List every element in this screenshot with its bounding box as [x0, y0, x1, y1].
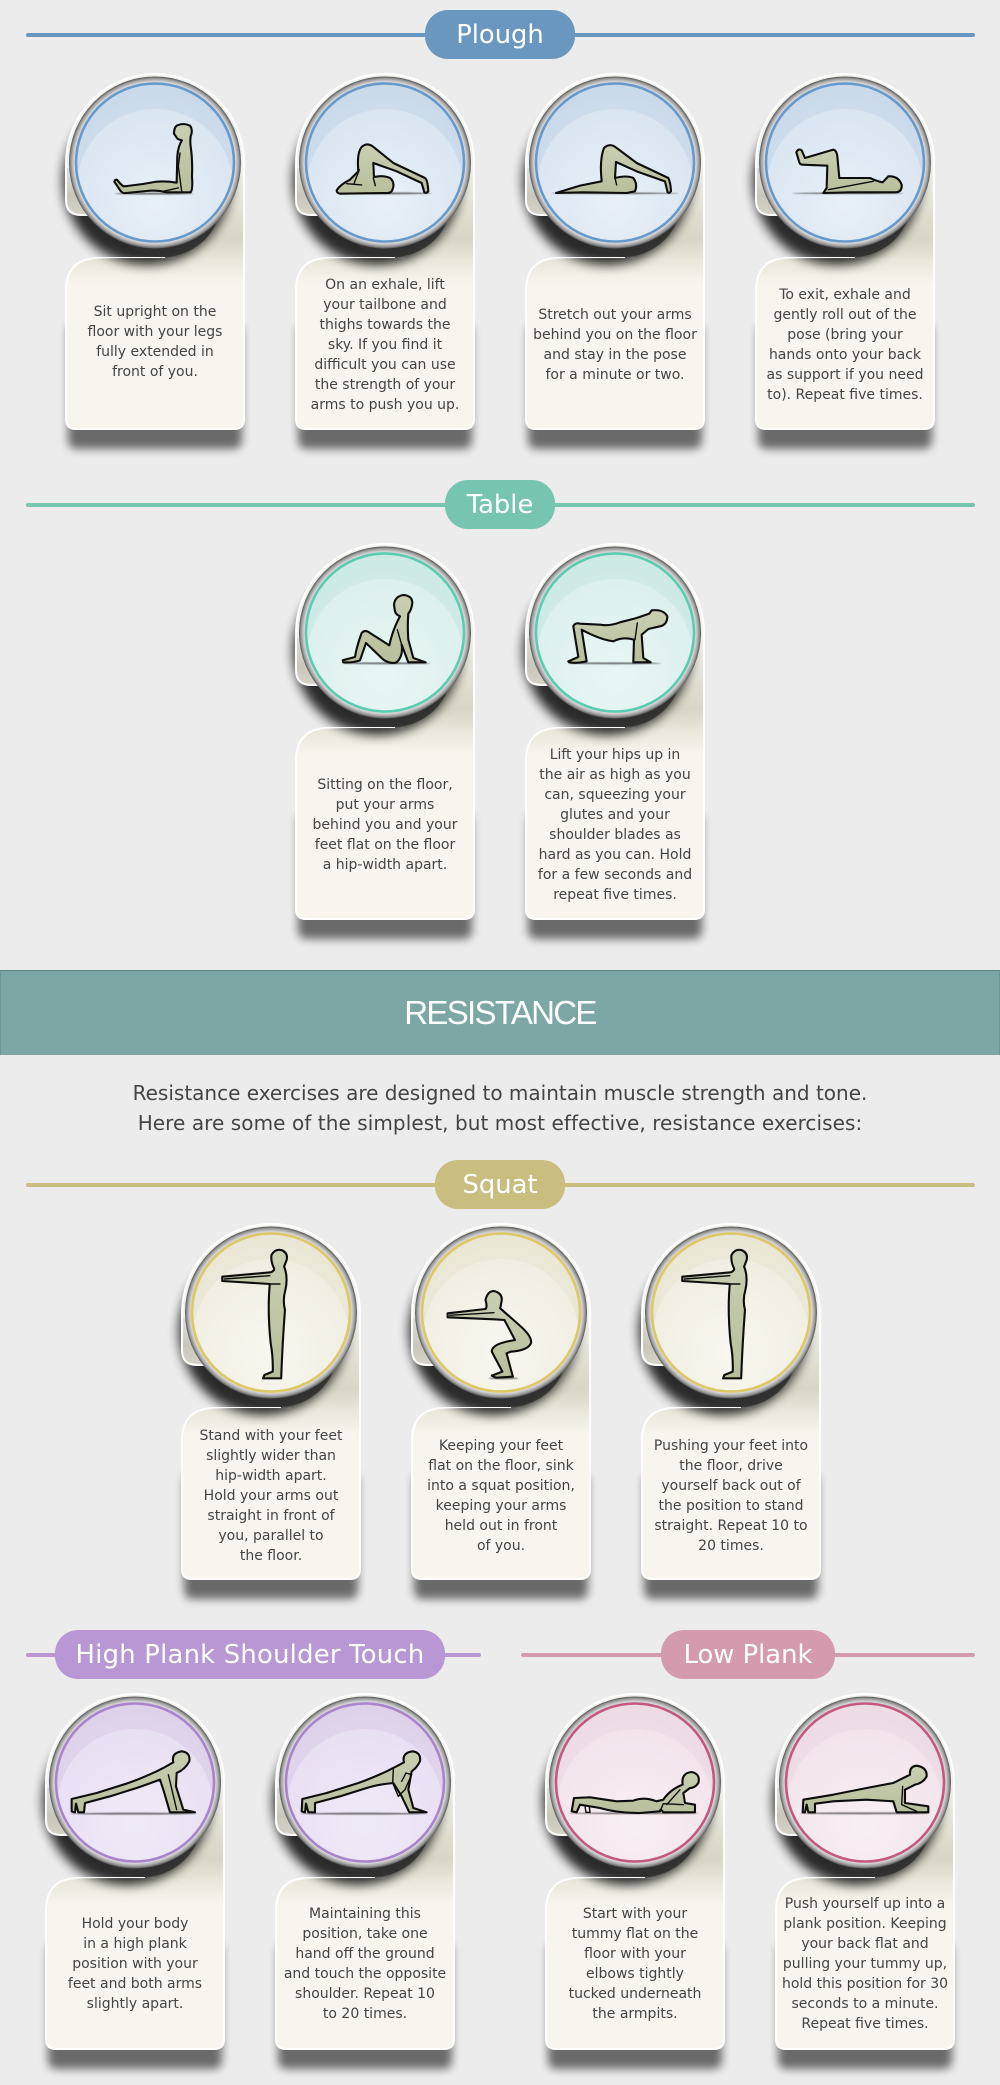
card: high plank step 2 [264, 1693, 458, 2076]
figure: plough with arms stretched out [552, 145, 678, 194]
card: squat step 2: flat on the floor, sink [428, 1458, 574, 1474]
figure: hips lifted, legs over [337, 144, 432, 194]
banner: resistance [0, 970, 1000, 1055]
heading: Plough: Plough [456, 20, 544, 50]
card: high plank step 1: in a high plank [83, 1936, 187, 1952]
card: low plank step 2: pulling your tummy up, [783, 1956, 947, 1972]
card: squat step 3: the position to stand [659, 1498, 803, 1514]
card: table step 1: Sitting on the floor, [317, 777, 453, 793]
card: plough step 4: as support if you need [767, 367, 923, 383]
card: squat step 3: yourself back out of [661, 1478, 801, 1494]
card: high plank step 2: position, take one [302, 1926, 428, 1942]
card: table step 2: glutes and your [560, 807, 670, 823]
figure: rolling out with legs raised [792, 150, 903, 194]
card: table step 1: a hip-width apart. [323, 857, 447, 873]
card: squat step 3: Pushing your feet into [654, 1438, 808, 1454]
figure: lying on tummy, elbows tucked [568, 1772, 699, 1814]
card: high plank step 1: Hold your body [82, 1916, 188, 1932]
figure: standing with arms forward [222, 1250, 287, 1378]
card: table step 2: Lift your hips up in [550, 747, 680, 763]
card: low plank step 2: hold this position for 30 [782, 1976, 948, 1992]
card: low plank step 2: Push yourself up into a [785, 1896, 945, 1912]
card: high plank step 1: feet and both arms [68, 1976, 202, 1992]
card: plough step 3: and stay in the pose [544, 347, 686, 363]
card: squat step 3 [630, 1223, 824, 1606]
card: low plank step 2: Repeat five times. [801, 2016, 929, 2032]
card: table step 2: can, squeezing your [544, 787, 686, 803]
card: plough step 3: Stretch out your arms [538, 307, 692, 323]
card: plough step 2: On an exhale, lift [325, 277, 445, 293]
heading: Table: Table [467, 490, 533, 520]
card: high plank step 2: hand off the ground [295, 1946, 435, 1962]
card: table step 1: put your arms [336, 797, 434, 813]
card: table step 2: the air as high as you [539, 767, 691, 783]
card: table step 1: feet flat on the floor [315, 837, 455, 853]
card: plough step 4: hands onto your back [769, 347, 921, 363]
card: table step 1: behind you and your [313, 817, 457, 833]
card: low plank step 1: elbows tightly [586, 1966, 684, 1982]
card: squat step 2 [400, 1223, 594, 1606]
card: table step 2: hard as you can. Hold [539, 847, 691, 863]
card: table step 2: shoulder blades as [549, 827, 681, 843]
card: plough step 3: behind you on the floor [533, 327, 697, 343]
card: low plank step 1: tucked underneath [569, 1986, 701, 2002]
card: squat step 3: straight. Repeat 10 to [654, 1518, 808, 1534]
card: plough step 2: sky. If you find it [328, 337, 442, 353]
card: squat step 2: Keeping your feet [439, 1438, 563, 1454]
card: low plank step 1: tummy flat on the [572, 1926, 698, 1942]
card: plough step 2: difficult you can use [314, 357, 456, 373]
card: table step 2 [514, 543, 708, 946]
heading: Low Plank [521, 1630, 975, 1679]
card: squat step 3: 20 times. [698, 1538, 764, 1554]
figure: squatting with arms forward [448, 1291, 531, 1379]
heading: Squat: Squat [462, 1170, 538, 1200]
card: high plank step 2: to 20 times. [323, 2006, 407, 2022]
card: table step 2: repeat five times. [553, 887, 677, 903]
card: squat step 1: the floor. [240, 1548, 302, 1564]
card: low plank step 2: seconds to a minute. [791, 1996, 939, 2012]
card: plough step 1: front of you. [112, 364, 198, 380]
card: squat step 1: slightly wider than [206, 1448, 336, 1464]
heading: High Plank Shoulder Touch [26, 1630, 481, 1679]
card: high plank step 1: position with your [72, 1956, 198, 1972]
card: table step 1 [284, 543, 478, 946]
heading: Table [26, 480, 975, 529]
card: plough step 1 [54, 73, 248, 456]
card: squat step 1: hip-width apart. [215, 1468, 327, 1484]
card: plough step 4: To exit, exhale and [779, 287, 911, 303]
card: plough step 2: the strength of your [315, 377, 455, 393]
card: squat step 1: Hold your arms out [204, 1488, 338, 1504]
intro text: Here are some of the simplest, but most effective, resistance exercises: [138, 1111, 862, 1135]
heading: Plough [26, 10, 975, 59]
card: plough step 3: for a minute or two. [545, 367, 685, 383]
card: plough step 4: gently roll out of the [773, 307, 917, 323]
card: squat step 1: you, parallel to [218, 1528, 324, 1544]
card: plough step 2: thighs towards the [320, 317, 450, 333]
figure: standing straight with arms forward [682, 1250, 747, 1378]
card: low plank step 2: plank position. Keeping [783, 1916, 947, 1932]
card: table step 2: for a few seconds and [538, 867, 692, 883]
card: plough step 1: floor with your legs [88, 324, 222, 340]
card: squat step 1: Stand with your feet [200, 1428, 342, 1444]
card: low plank step 1 [534, 1693, 728, 2076]
card: squat step 2: of you. [477, 1538, 525, 1554]
card: squat step 2: held out in front [445, 1518, 557, 1534]
heading: Squat [26, 1160, 975, 1209]
heading: Low Plank: Low Plank [684, 1640, 812, 1670]
figure: forearm plank [800, 1766, 930, 1814]
card: plough step 2: your tailbone and [323, 297, 447, 313]
figure: seated upright with legs extended [114, 124, 193, 195]
figure: high plank touching shoulder [300, 1751, 427, 1815]
card: plough step 4: pose (bring your [787, 327, 903, 343]
card: squat step 2: into a squat position, [427, 1478, 575, 1494]
banner: resistance: RESISTANCE [404, 994, 596, 1031]
heading: High Plank Shoulder Touch: High Plank Shoulder Touch [76, 1640, 424, 1670]
card: high plank step 2: Maintaining this [309, 1906, 421, 1922]
card: squat step 2: keeping your arms [436, 1498, 566, 1514]
card: plough step 1: fully extended in [96, 344, 214, 360]
card: high plank step 2: and touch the opposite [284, 1966, 446, 1982]
card: high plank step 2: shoulder. Repeat 10 [295, 1986, 435, 2002]
card: plough step 4 [744, 73, 938, 456]
card: high plank step 1: slightly apart. [87, 1996, 183, 2012]
card: high plank step 1 [34, 1693, 228, 2076]
card: low plank step 2 [764, 1693, 958, 2076]
card: plough step 2 [284, 73, 478, 456]
figure: seated, knees bent, arms behind [342, 595, 430, 664]
card: low plank step 1: Start with your [583, 1906, 687, 1922]
card: plough step 3 [514, 73, 708, 456]
intro text: Resistance exercises are designed to maintain muscle strength and tone. [133, 1081, 867, 1105]
card: squat step 1 [170, 1223, 364, 1606]
card: low plank step 1: floor with your [584, 1946, 686, 1962]
figure: high plank [70, 1751, 197, 1815]
figure: table top with hips raised [568, 610, 667, 664]
card: plough step 4: to). Repeat five times. [767, 387, 923, 403]
card: squat step 3: the floor, drive [679, 1458, 783, 1474]
card: low plank step 1: the armpits. [592, 2006, 678, 2022]
card: plough step 2: arms to push you up. [311, 397, 459, 413]
card: squat step 1: straight in front of [207, 1508, 335, 1524]
card: plough step 1: Sit upright on the [94, 304, 216, 320]
intro text [133, 1081, 867, 1135]
card: low plank step 2: your back flat and [801, 1936, 929, 1952]
